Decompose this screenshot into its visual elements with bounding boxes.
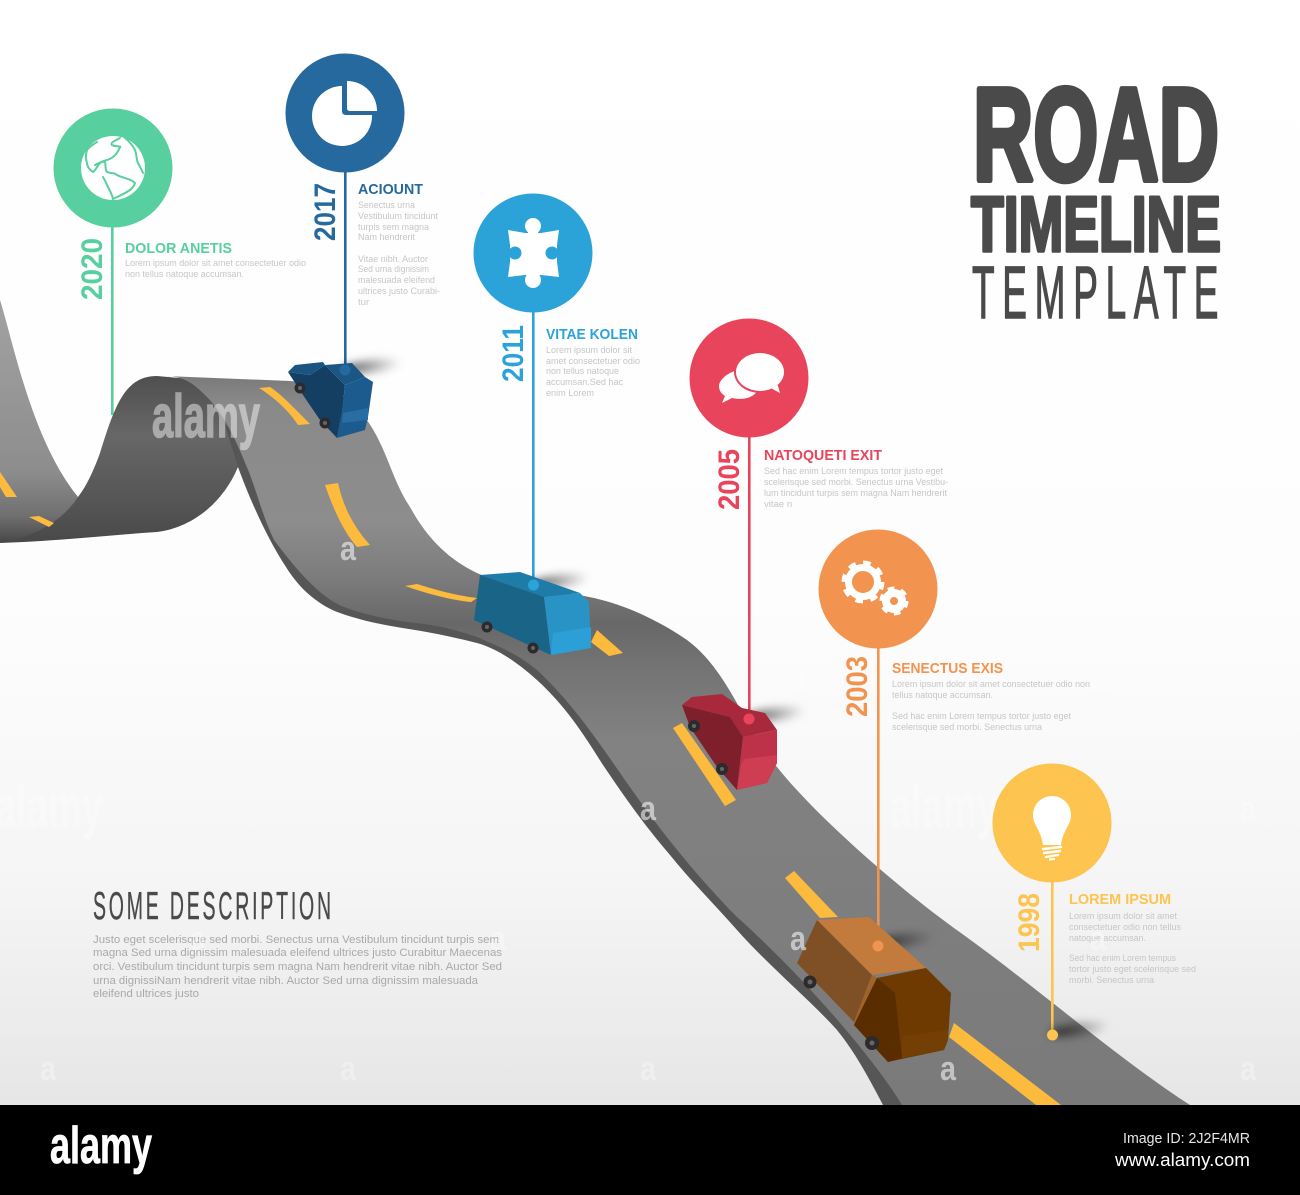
pin line: 1998: [1051, 880, 1054, 1035]
text block: Lorem Ipsum: [1069, 891, 1196, 986]
text block: Vitae Kolen: [546, 326, 640, 399]
text block: Aciount: malesuada eleifend: [358, 275, 435, 286]
watermark marks: a: [490, 920, 507, 958]
watermark marks: a: [1240, 1050, 1257, 1088]
pin line: 2005: [748, 435, 751, 720]
drop shadows behind the vehicles: [341, 356, 1111, 1039]
road illustration: [0, 300, 1190, 1105]
text block: Vitae Kolen: accumsan.Sed hac: [546, 377, 623, 388]
title: TEMPLATE: [972, 252, 1226, 334]
pin line: 2011: [532, 310, 535, 585]
text block: Senectus Exis: Lorem ipsum dolor sit amet consectetuer odio non: [892, 679, 1090, 690]
vehicle: navy truck: [288, 362, 373, 438]
road: dark underside loop: [0, 376, 255, 543]
text block: Dolor Anetis: non tellus natoque accumsan.: [125, 269, 244, 280]
text block: Lorem Ipsum: Sed hac enim Lorem tempus: [1069, 953, 1176, 964]
text block: Senectus Exis: tellus natoque accumsan.: [892, 690, 993, 701]
circle: 1998 yellow: [992, 764, 1112, 882]
year: 2003: 2003: [841, 656, 874, 717]
watermark marks: a: [40, 1050, 57, 1088]
watermark marks: a: [790, 920, 807, 958]
description paragraph: Justo eget scelerisque sed morbi. Senectus urna Vestibulum tincidunt turpis sem: [93, 934, 499, 946]
circle: 2003 orange: [818, 530, 938, 648]
watermark marks: a: [1090, 660, 1107, 698]
road: far-left descending section: [0, 300, 78, 543]
watermark marks: a: [340, 1050, 357, 1088]
text block: Natoqueti Exit: scelerisque sed morbi. Senectus urna Vestibu-: [764, 477, 948, 488]
text block: Lorem Ipsum: morbi. Senectus urna: [1069, 975, 1155, 986]
text block: Aciount: Sed urna dignissim: [358, 264, 429, 275]
pin dots: [340, 364, 1058, 1040]
watermark marks: a: [640, 790, 657, 828]
pin line: 2020: [111, 225, 114, 415]
vehicle: red truck: [682, 694, 777, 790]
text block: Vitae Kolen: amet consectetuer odio: [546, 356, 640, 367]
text block: Lorem Ipsum: consectetuer odio non tellus: [1069, 922, 1181, 933]
watermark marks: a: [1240, 790, 1257, 828]
text block: Vitae Kolen: Lorem ipsum dolor sit: [546, 345, 632, 356]
text block: Natoqueti Exit: lum tincidunt turpis sem magna Nam hendrerit: [764, 488, 947, 499]
text block: Aciount: turpis sem magna: [358, 222, 430, 233]
text block: Aciount: ultrices justo Curabi-: [358, 286, 440, 297]
text block: Aciount: Senectus urna: [358, 200, 416, 211]
text block: Aciount: [358, 181, 440, 308]
text block: Natoqueti Exit: [764, 447, 948, 510]
pin line: 2003: [877, 646, 880, 946]
watermark marks: a: [790, 660, 807, 698]
road: yellow centre dashes: [0, 387, 1061, 1105]
watermark marks: alamy: [597, 513, 705, 580]
text block: Vitae Kolen: VITAE KOLEN: [546, 326, 638, 343]
description paragraph: [93, 934, 502, 1000]
year: 2020: 2020: [76, 238, 109, 300]
pin line: 2017: [344, 170, 347, 370]
watermark marks: a: [640, 1050, 657, 1088]
description paragraph: urna dignissiNam hendrerit vitae nibh. Auctor Sed urna dignissim malesuada: [93, 975, 479, 987]
text block: Dolor Anetis: DOLOR ANETIS: [125, 240, 232, 257]
circle: 2011 blue: [474, 194, 592, 312]
text block: Aciount: ACIOUNT: [358, 181, 423, 198]
watermark marks: [0, 383, 1257, 1088]
icon: pie chart: [312, 81, 377, 146]
text block: Aciount: Vestibulum tincidunt: [358, 211, 438, 222]
text block: Natoqueti Exit: vitae n: [764, 499, 792, 510]
text block: Lorem Ipsum: tortor justo eget scelerisque sed: [1069, 964, 1196, 975]
year: 2011: 2011: [497, 325, 530, 382]
text block: Senectus Exis: scelerisque sed morbi. Senectus urna: [892, 722, 1043, 733]
text block: Senectus Exis: [892, 660, 1090, 733]
circle: 2020 green: [54, 108, 172, 228]
watermark marks: a: [940, 1050, 957, 1088]
icon: light bulb: [1033, 796, 1071, 860]
watermark marks: alamy: [890, 773, 998, 840]
vehicle: blue van: [474, 572, 591, 655]
text block: Lorem Ipsum: natoque accumsan.: [1069, 933, 1146, 944]
vehicle: brown truck: [797, 917, 951, 1062]
road: side edge band: [225, 425, 905, 1105]
year: 2005: 2005: [713, 449, 746, 510]
description heading: SOME DESCRIPTION: [93, 884, 334, 928]
title: [971, 61, 1226, 334]
text block: Aciount: Vitae nibh. Auctor: [358, 254, 429, 265]
watermark marks: a: [340, 530, 357, 568]
text block: Vitae Kolen: non tellus natoque: [546, 366, 619, 377]
footer image id: Image ID: 2J2F4MR: [1123, 1130, 1250, 1147]
text block: Natoqueti Exit: Sed hac enim Lorem tempus tortor justo eget: [764, 466, 943, 477]
footer bar: [0, 1105, 1300, 1195]
watermark marks: alamy: [0, 773, 103, 840]
footer website: www.alamy.com: [1114, 1150, 1250, 1170]
text block: Vitae Kolen: enim Lorem: [546, 388, 594, 399]
text block: Lorem Ipsum: LOREM IPSUM: [1069, 891, 1171, 908]
description paragraph: orci. Vestibulum tincidunt turpis sem magna Nam hendrerit vitae nibh. Auctor Sed: [93, 961, 502, 973]
text block: Aciount: tur: [358, 297, 370, 308]
text block: Lorem Ipsum: Lorem ipsum dolor sit amet: [1069, 911, 1177, 922]
text block: Natoqueti Exit: NATOQUETI EXIT: [764, 447, 882, 464]
icon: speech bubbles: [719, 351, 786, 403]
watermark marks: a: [1090, 920, 1107, 958]
text block: Dolor Anetis: [125, 240, 306, 280]
icon: globe: [81, 136, 145, 200]
text block: Dolor Anetis: Lorem ipsum dolor sit amet consectetuer odio: [125, 258, 306, 269]
footer logo: alamy: [50, 1117, 152, 1175]
description paragraph: eleifend ultrices justo: [93, 988, 199, 1000]
text block: Senectus Exis: Sed hac enim Lorem tempus tortor justo eget: [892, 711, 1071, 722]
text block: Senectus Exis: SENECTUS EXIS: [892, 660, 1003, 677]
circle: 2017 navy: [286, 54, 404, 172]
watermark marks: alamy: [1042, 383, 1150, 450]
year: 1998: 1998: [1013, 893, 1046, 952]
icon: gears: [844, 563, 906, 614]
road: main surface: [165, 376, 1190, 1105]
watermark marks: alamy: [152, 383, 260, 450]
icon: puzzle piece: [505, 218, 562, 288]
text block: Aciount: Nam hendrerit: [358, 232, 415, 243]
year: 2017: 2017: [309, 183, 342, 241]
watermark marks: a: [1240, 530, 1257, 568]
circle: 2005 red: [690, 318, 808, 438]
description paragraph: magna Sed urna dignissim malesuada eleifend ultrices justo Curabitur Maecenas: [93, 947, 502, 959]
watermark marks: a: [190, 920, 207, 958]
